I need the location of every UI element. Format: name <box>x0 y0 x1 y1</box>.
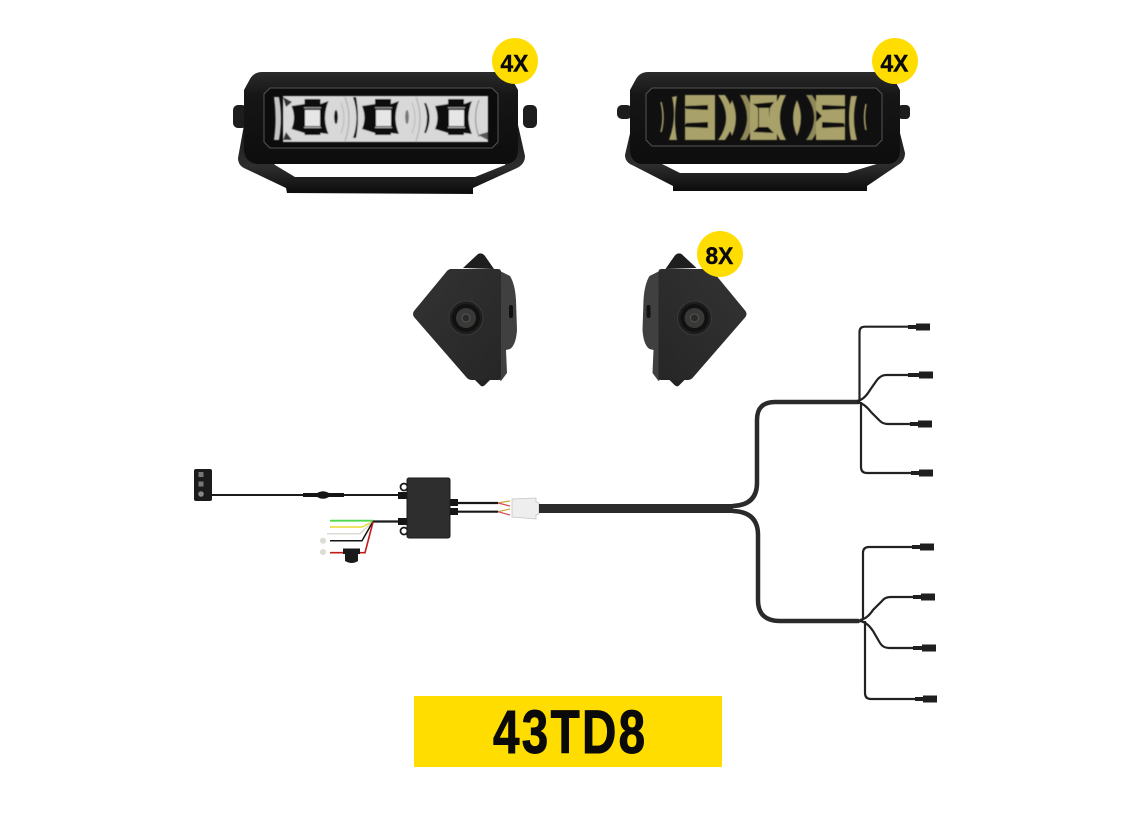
product code banner: 43TD8 <box>493 697 647 766</box>
control box <box>398 478 458 538</box>
pod slot <box>646 305 650 318</box>
pod slot <box>509 305 513 318</box>
lower branch wires <box>860 547 915 699</box>
pod top knob <box>666 253 696 269</box>
white wire <box>327 522 373 534</box>
pod top knob <box>463 253 494 269</box>
badge: 8X pods <box>697 231 743 277</box>
short colored leads <box>498 501 510 515</box>
yellow wire <box>330 522 373 527</box>
ring terminals <box>320 538 326 555</box>
mounting bracket <box>625 125 905 191</box>
lower branch connectors <box>912 544 937 702</box>
badge: 4X amber light: 4X <box>880 50 909 77</box>
pod bottom nub <box>474 379 491 386</box>
white multi-pin connector <box>512 498 539 519</box>
black wire <box>330 522 373 541</box>
pod side plate <box>642 270 670 381</box>
lens frame <box>646 88 882 146</box>
product code banner <box>414 696 722 767</box>
power wire stem <box>373 520 400 523</box>
switch cable <box>212 494 400 496</box>
optic module 1 <box>283 97 358 141</box>
pod lens <box>449 301 483 335</box>
wiring harness: lighting branches <box>539 324 937 702</box>
main trunk <box>539 504 733 513</box>
wiring harness: power and control <box>194 469 539 563</box>
control switch <box>194 469 212 501</box>
housing <box>630 72 900 164</box>
light bar: white lens <box>233 72 537 194</box>
optic module 2 <box>362 97 430 141</box>
green wire <box>330 520 373 522</box>
left bracket pod <box>413 253 517 386</box>
output cables <box>457 503 498 512</box>
mounting knobs <box>617 105 910 119</box>
upper and lower branch cables <box>733 402 858 621</box>
light bar: amber lens <box>617 72 910 191</box>
inline connector <box>303 491 344 499</box>
pod lens <box>678 301 712 335</box>
pod side plate <box>490 270 517 381</box>
upper branch connectors <box>908 324 933 476</box>
red wire <box>330 522 373 553</box>
badge: 4X white light <box>492 38 538 84</box>
pod face <box>413 269 501 380</box>
badge: 4X white light: 4X <box>500 50 529 77</box>
right bracket pod <box>642 253 746 386</box>
optic module 3 <box>435 99 488 140</box>
white optics <box>274 96 488 142</box>
amber optics <box>661 95 866 140</box>
housing <box>244 72 518 164</box>
mounting knobs <box>233 105 537 128</box>
pod face <box>658 269 746 380</box>
badge: 4X amber light <box>872 38 918 84</box>
mounting bracket <box>238 125 525 194</box>
badge: 8X pods: 8X <box>706 242 734 269</box>
lens frame <box>264 88 498 148</box>
fuse holder <box>343 548 360 563</box>
upper branch wires <box>857 327 911 473</box>
pod bottom nub <box>668 379 686 386</box>
